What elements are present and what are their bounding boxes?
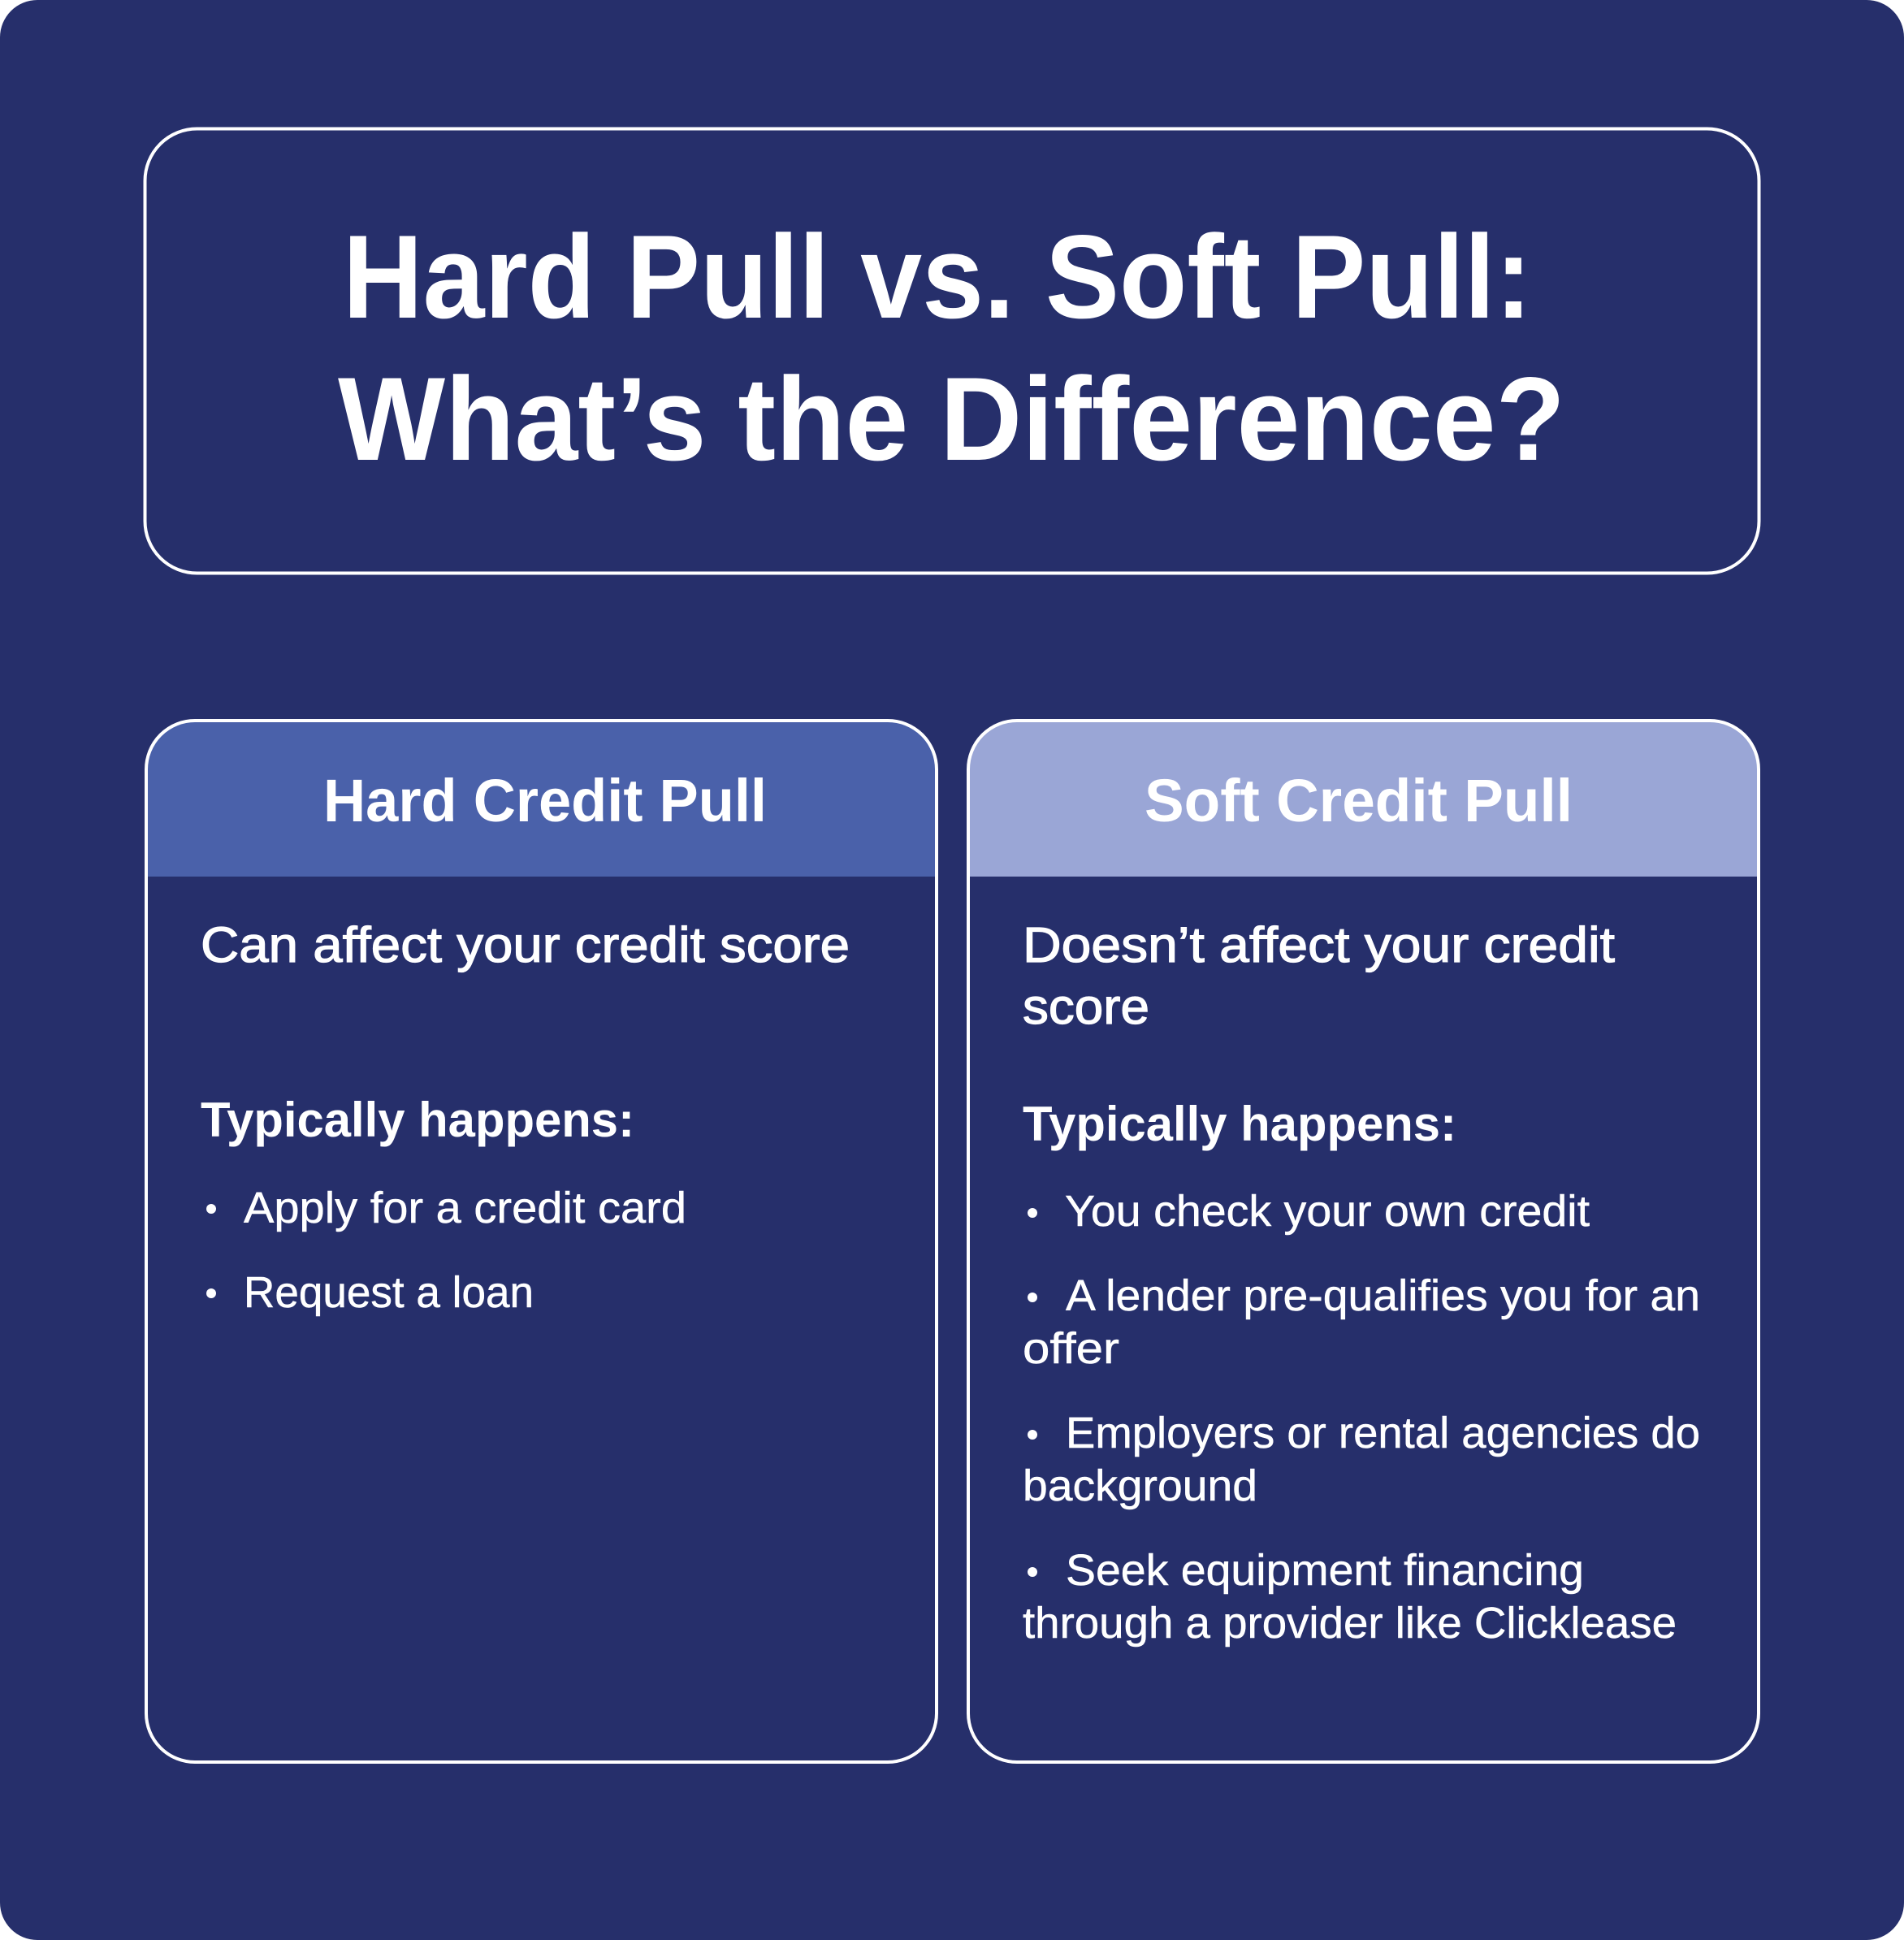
soft pull bullet 3: background bbox=[1023, 1461, 1257, 1510]
panel: hard credit pull bbox=[146, 721, 937, 1762]
soft pull summary: Doesn’t affect your credit bbox=[1023, 917, 1615, 972]
soft pull bullet 3: Employers or rental agencies do bbox=[1066, 1409, 1700, 1457]
soft pull heading: Soft Credit Pull bbox=[1145, 767, 1573, 834]
soft pull header band bbox=[968, 721, 1759, 877]
soft pull bullet 4 bbox=[1023, 1546, 1677, 1648]
hard pull subheading: Typically happens: bbox=[201, 1093, 634, 1147]
hard pull summary: Can affect your credit score bbox=[201, 917, 850, 972]
hard pull header band bbox=[146, 721, 937, 877]
hard pull card border bbox=[146, 721, 937, 1762]
soft pull card border bbox=[968, 721, 1759, 1762]
title panel bbox=[145, 128, 1759, 574]
soft pull bullet 2: offer bbox=[1023, 1324, 1119, 1373]
panel: soft credit pull bbox=[968, 721, 1759, 1762]
soft pull summary bbox=[1023, 917, 1615, 1034]
hard pull bullet 2: Request a loan bbox=[244, 1268, 534, 1317]
soft pull bullet 4: Seek equipment financing bbox=[1066, 1546, 1584, 1595]
hard pull bullet 1: Apply for a credit card bbox=[244, 1184, 686, 1232]
title line 1: Hard Pull vs. Soft Pull: bbox=[343, 210, 1532, 343]
hard pull heading: Hard Credit Pull bbox=[323, 767, 767, 834]
soft pull bullet 1: You check your own credit bbox=[1065, 1187, 1590, 1236]
soft pull bullet 2: A lender pre-qualifies you for an bbox=[1066, 1271, 1700, 1320]
soft pull bullet 3 bbox=[1023, 1409, 1700, 1510]
soft pull summary: score bbox=[1023, 979, 1149, 1034]
soft pull subheading: Typically happens: bbox=[1023, 1097, 1456, 1151]
title line 2: What’s the Difference? bbox=[338, 353, 1565, 485]
soft pull bullet 4: through a provider like Clicklease bbox=[1023, 1599, 1677, 1648]
soft pull bullet 2 bbox=[1023, 1271, 1700, 1373]
